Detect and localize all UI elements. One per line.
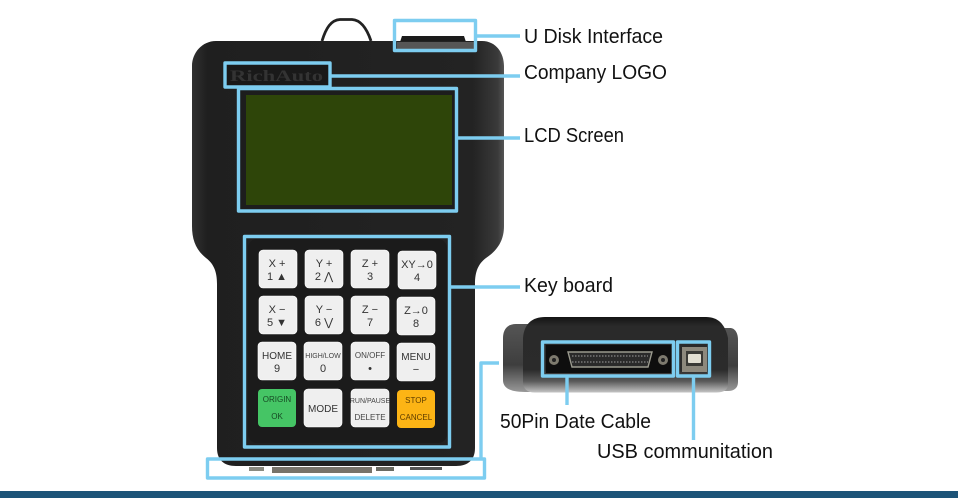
keys row 3: HOME (262, 351, 292, 362)
right wing (722, 328, 738, 391)
keys row 1: Z + (362, 258, 378, 270)
keys row 2: Z − (362, 304, 378, 316)
keys row 2: X − (269, 304, 285, 316)
keys row 1: 2 ⋀ (315, 271, 334, 283)
callout: LCD screen (238, 88, 520, 211)
50 pin connector (546, 345, 671, 373)
controller handheld unit (192, 20, 504, 473)
keys row 3: • (368, 363, 372, 375)
keys row 3 (258, 342, 435, 381)
label: U Disk Interface: U Disk Interface (524, 26, 663, 48)
keys row 4: OK (271, 412, 283, 421)
U disk port (400, 36, 466, 42)
keys row 2: 5 ▼ (267, 317, 287, 329)
keys row 1: 4 (414, 272, 420, 284)
left wing (503, 324, 530, 392)
grey band below port (397, 42, 475, 49)
keys row 4: ORIGIN (263, 395, 291, 404)
keys row 1: 3 (367, 271, 373, 283)
callout: U disk (394, 20, 520, 50)
keys row 2: 7 (367, 317, 373, 329)
keys row 3: 9 (274, 363, 280, 375)
keys row 2 (259, 296, 435, 335)
label: 50Pin Date Cable: 50Pin Date Cable (500, 411, 651, 433)
LCD screen (240, 90, 455, 209)
callout: keyboard (244, 236, 520, 447)
keys row 1: XY→0 (401, 259, 433, 271)
keys row 2: Y − (316, 304, 332, 316)
side view of unit (503, 317, 738, 392)
callout: bottom connector (208, 363, 499, 478)
keys row 3: MENU (401, 352, 431, 363)
keys row 2: Z→0 (404, 305, 428, 317)
keys row 4 (258, 389, 435, 428)
embossed logo (226, 64, 329, 86)
keys row 2: 6 ⋁ (315, 317, 334, 329)
controller body (192, 41, 504, 466)
keypad (248, 239, 447, 443)
callout: 50 pin (542, 342, 674, 405)
keys row 1: Y + (316, 258, 332, 270)
keys row 2: 8 (413, 318, 419, 330)
keys row 3: 0 (320, 363, 326, 375)
keys row 4: CANCEL (400, 413, 433, 422)
keys row 3: HIGH/LOW (305, 353, 341, 360)
keys row 4: MODE (308, 404, 338, 415)
keys row 3: ON/OFF (355, 351, 385, 360)
keys row 4: DELETE (354, 413, 386, 422)
keys row 3: − (413, 364, 419, 376)
USB port (682, 347, 707, 372)
callout: company logo (225, 63, 520, 87)
keys row 4: STOP (405, 396, 427, 405)
side view casing (523, 317, 728, 392)
label: LCD Screen: LCD Screen (524, 125, 624, 147)
keypad panel (248, 239, 447, 443)
keys row 1: X + (269, 258, 285, 270)
label: Company LOGO: Company LOGO (524, 62, 667, 84)
connector edge at bottom of unit (249, 467, 442, 473)
keys row 1 (259, 250, 436, 289)
label: Key board: Key board (524, 275, 613, 297)
label: USB communitation: USB communitation (597, 441, 773, 463)
callout: USB (678, 342, 710, 440)
embossed logo: RichAuto (230, 68, 323, 85)
keys row 4: RUN/PAUSE (350, 398, 390, 405)
hanging loop (322, 20, 371, 41)
bottom bar (0, 491, 958, 498)
keys row 1: 1 ▲ (267, 271, 287, 283)
